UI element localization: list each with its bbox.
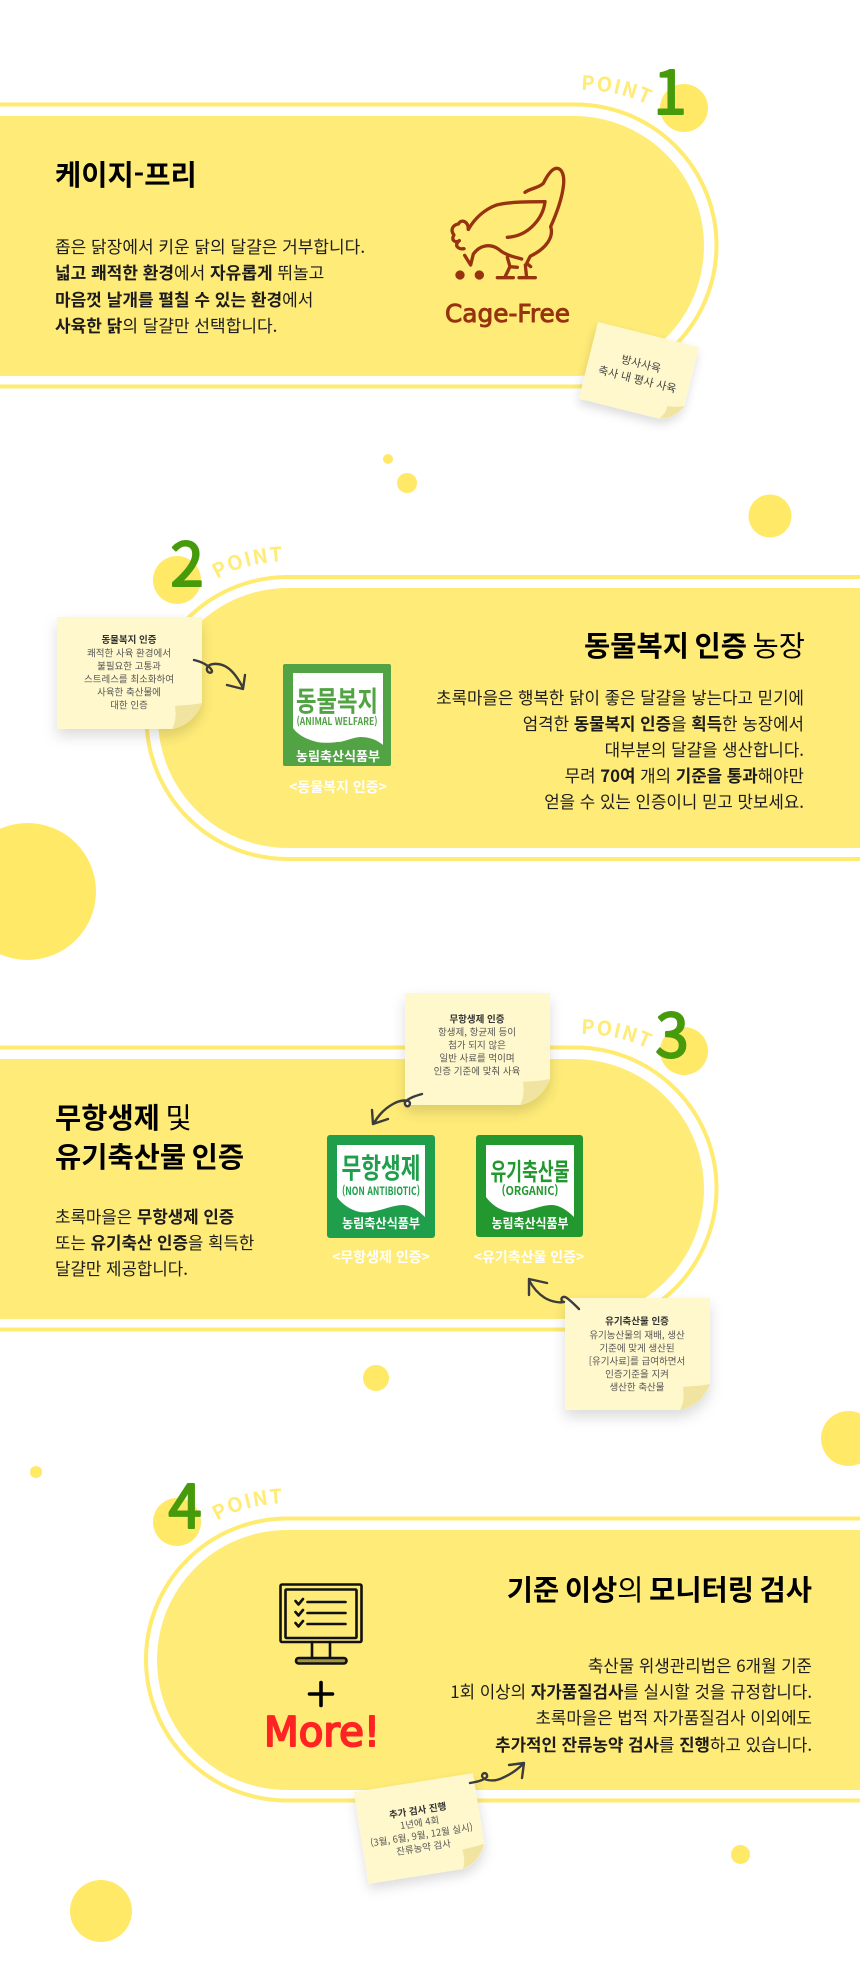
- sticky note: free range: 방사사육: [620, 351, 663, 376]
- arrow: note to welfare badge: [194, 660, 245, 689]
- badge: animal welfare certification: 농림축산식품부: [296, 746, 380, 765]
- point 3 badge: 3: [655, 988, 689, 1075]
- point 2 badge: [153, 517, 281, 604]
- text block: animal welfare description: 초록마을은 행복한 닭이 좋은 달걀을 낳는다고 믿기에: [436, 685, 804, 709]
- text block: monitoring description: [450, 1653, 812, 1756]
- sticky note: organic: 기준에 맞게 생산된: [599, 1340, 675, 1354]
- panel: point 3 antibiotic free and organic: [0, 988, 718, 1422]
- point 1 badge: 1: [653, 45, 687, 132]
- icon: monitor checklist: [280, 1584, 362, 1664]
- sticky note: organic: 생산한 축산물: [609, 1380, 665, 1394]
- badge: animal welfare certification: (ANIMAL WELFARE): [296, 714, 378, 729]
- sticky note: organic: [유기사료]를 급여하면서: [589, 1354, 685, 1368]
- panel: point 2 animal welfare: [52, 517, 860, 861]
- icon: chicken: [452, 168, 564, 278]
- badge: non antibiotic certification: [327, 1135, 435, 1238]
- icon label: Cage-Free: Cage-Free: [445, 299, 570, 328]
- decorative dots: [0, 454, 860, 1942]
- panel: point 1 cage-free: [0, 45, 718, 426]
- badge: organic certification: 농림축산식품부: [492, 1213, 569, 1232]
- sticky note: animal welfare: 대한 인증: [110, 698, 148, 712]
- text block: antibiotic description: 또는 유기축산 인증을 획득한: [55, 1230, 254, 1254]
- text block: monitoring description: 초록마을은 법적 자가품질검사 이외에도: [535, 1705, 812, 1729]
- text block: monitoring description: 1회 이상의 자가품질검사를 실시할 것을 규정합니다.: [450, 1679, 812, 1703]
- point 4 badge: 4: [168, 1459, 202, 1546]
- text block: antibiotic description: 초록마을은 무항생제 인증: [55, 1204, 234, 1228]
- arrow: note to non antibiotic badge: [372, 1094, 422, 1124]
- sticky note: animal welfare: 불필요한 고통과: [97, 658, 161, 672]
- point 2 badge: POINT: [212, 546, 281, 578]
- badge: organic certification: [476, 1135, 583, 1237]
- text block: cage-free description: 좁은 닭장에서 키운 닭의 달걀은 거부합니다.: [55, 233, 365, 258]
- text block: cage-free description: 사육한 닭의 달걀만 선택합니다.: [55, 312, 277, 337]
- badge: animal welfare certification: [283, 664, 391, 766]
- point 1 badge: POINT: [582, 75, 653, 103]
- arrow: note to description: [470, 1763, 524, 1783]
- sticky note: non antibiotic: [405, 993, 550, 1105]
- heading: antibiotic free and organic: [55, 1096, 244, 1176]
- sticky note: organic: 인증기준을 지켜: [605, 1366, 669, 1380]
- text block: cage-free description: 넓고 쾌적한 환경에서 자유롭게 뛰놀고: [55, 259, 324, 284]
- point 4 badge: [153, 1459, 281, 1546]
- sticky note: non antibiotic: 무항생제 인증: [449, 1012, 505, 1026]
- sticky note: free range: [579, 322, 699, 424]
- sticky note: animal welfare: 스트레스를 최소화하여: [84, 672, 174, 686]
- sticky note: animal welfare: 사육한 축산물에: [97, 684, 161, 698]
- sticky note: non antibiotic: 인증 기준에 맞춰 사육: [434, 1064, 521, 1078]
- More! label: More!: [264, 1708, 380, 1756]
- sticky note: animal welfare: 쾌적한 사육 환경에서: [87, 646, 171, 660]
- sticky note: extra test: 1년에 4회: [399, 1812, 440, 1832]
- sticky note: non antibiotic: 첨가 되지 않은: [448, 1038, 506, 1052]
- text block: animal welfare description: 무려 70여 개의 기준을 통과해야만: [565, 763, 804, 787]
- sticky note: extra test: (3월, 6월, 9월, 12월 실시): [369, 1819, 474, 1850]
- text block: animal welfare description: 얻을 수 있는 인증이니 믿고 맛보세요.: [544, 789, 804, 813]
- heading: antibiotic free and organic: 무항생제 및: [55, 1096, 192, 1137]
- badge: non antibiotic certification: 무항생제: [342, 1147, 420, 1187]
- text block: animal welfare description: 대부분의 달걀을 생산합니다.: [605, 737, 804, 761]
- heading: cage-free: 케이지-프리: [55, 153, 197, 194]
- text block: animal welfare description: [436, 685, 804, 813]
- badge: non antibiotic certification: 농림축산식품부: [342, 1213, 420, 1232]
- badge: organic certification: (ORGANIC): [502, 1182, 558, 1199]
- text block: animal welfare description: 엄격한 동물복지 인증을 획득한 농장에서: [523, 711, 804, 735]
- sticky note: animal welfare: 동물복지 인증: [101, 632, 157, 646]
- text block: monitoring description: 축산물 위생관리법은 6개월 기준: [588, 1653, 812, 1677]
- panel: point 4 monitoring: [144, 1459, 860, 1892]
- caption: organic: <유기축산물 인증>: [474, 1247, 584, 1267]
- point 3 badge: POINT: [582, 1019, 653, 1047]
- icon: plus: [310, 1682, 332, 1706]
- sticky note: organic: [565, 1298, 710, 1410]
- point 1 badge: [582, 45, 708, 132]
- heading: monitoring test: 기준 이상의 모니터링 검사: [507, 1568, 812, 1609]
- heading: animal welfare farm: 동물복지 인증 농장: [584, 624, 805, 665]
- text block: antibiotic description: [55, 1204, 254, 1280]
- sticky note: animal welfare: [57, 617, 202, 729]
- text block: monitoring description: 추가적인 잔류농약 검사를 진행하고 있습니다.: [495, 1732, 812, 1756]
- caption: non antibiotic: <무항생제 인증>: [332, 1247, 430, 1267]
- text block: cage-free description: 마음껏 날개를 펼칠 수 있는 환경에서: [55, 286, 313, 311]
- badge: organic certification: 유기축산물: [490, 1152, 570, 1187]
- sticky note: extra test: [354, 1773, 487, 1884]
- sticky note: extra test: 잔류농약 검사: [395, 1836, 452, 1858]
- text block: antibiotic description: 달걀만 제공합니다.: [55, 1256, 188, 1280]
- sticky note: extra test: 추가 검사 진행: [388, 1798, 447, 1821]
- sticky note: organic: 유기농산물의 재배, 생산: [589, 1328, 685, 1342]
- heading: antibiotic free and organic: 유기축산물 인증: [55, 1135, 244, 1176]
- point 3 badge: [582, 988, 708, 1075]
- arrow: note to organic badge: [529, 1279, 579, 1309]
- badge: animal welfare certification: 동물복지: [296, 680, 378, 720]
- point 2 badge: 2: [170, 517, 204, 604]
- sticky note: organic: 유기축산물 인증: [605, 1314, 669, 1328]
- point 4 badge: POINT: [212, 1488, 281, 1520]
- sticky note: free range: 축사 내 평사 사육: [597, 362, 678, 397]
- sticky note: non antibiotic: 일반 사료를 먹이며: [439, 1050, 515, 1064]
- text block: cage-free description: [55, 233, 365, 337]
- caption: animal welfare: <동물복지 인증>: [289, 777, 387, 797]
- sticky note: non antibiotic: 항생제, 항균제 등이: [438, 1024, 516, 1038]
- badge: non antibiotic certification: (NON ANTIBIOTIC): [342, 1183, 420, 1199]
